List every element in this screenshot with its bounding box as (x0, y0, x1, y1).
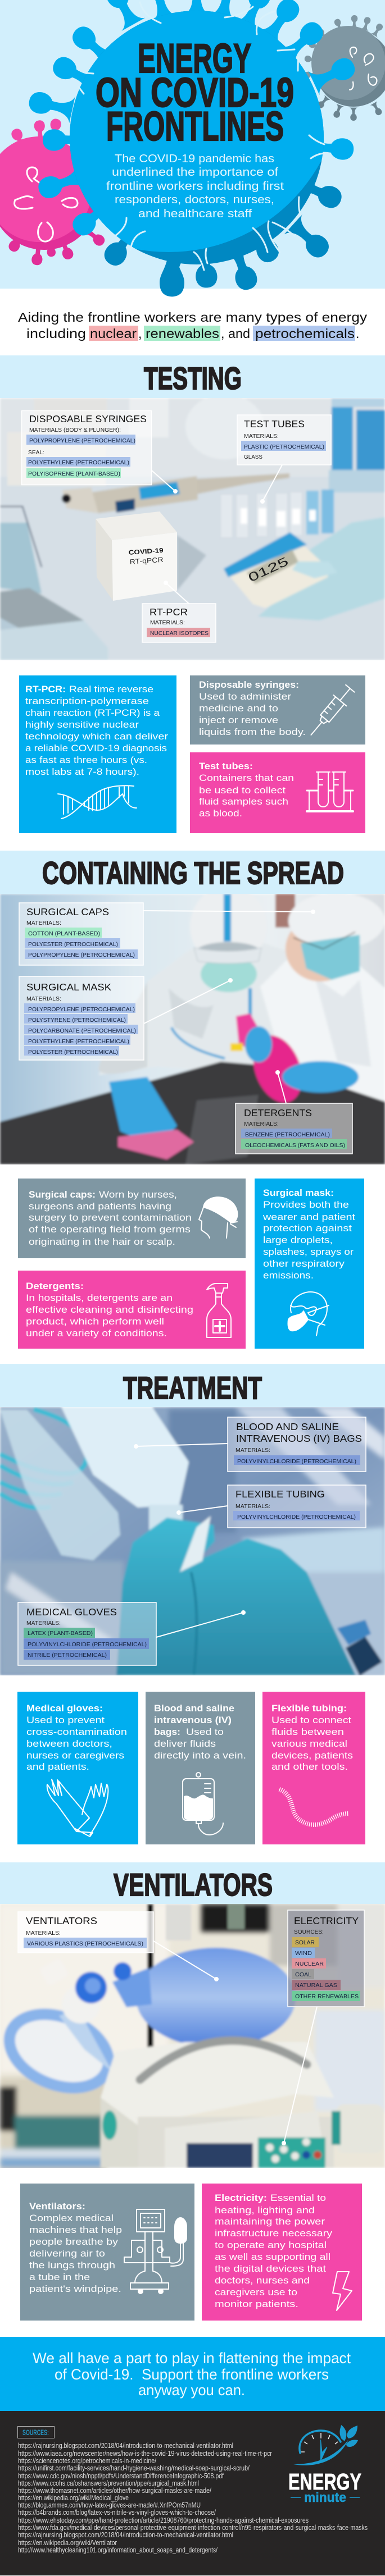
section: containing the spread (0, 851, 385, 1349)
panel: surgical mask info: splashes, sprays or (263, 1246, 354, 1257)
photo: ventilator (0, 1904, 385, 2173)
callout: electricity: OTHER RENEWABLES (295, 1993, 359, 2000)
source list: https://en.wikipedia.org/wiki/Ventilator (18, 2539, 117, 2547)
callout: disposable syringes: MATERIALS (BODY & PLUNGER): (29, 427, 121, 433)
panel: surgical caps info: surgery to prevent contamination (29, 1212, 192, 1223)
panel: surgical caps info: Surgical caps: (29, 1189, 96, 1200)
product box: RT-qPCR (129, 556, 164, 566)
panel: surgical caps info: originating in the hair or scalp. (29, 1236, 175, 1247)
source list: https://rajnursing.blogspot.com/2018/04/introduction-to-mechanical-ventilator.html (18, 2531, 233, 2539)
text block: energy types: nuclear (90, 326, 137, 341)
source list: https://en.wikipedia.org/wiki/Medical_glove (18, 2494, 129, 2502)
panel: ventilators info: a tube in the (29, 2272, 90, 2282)
source list: https://www.ccohs.ca/oshanswers/prevention/ppe/surgical_mask.html (18, 2479, 199, 2487)
callout: rt-pcr (142, 581, 216, 642)
photo: iv bags and gloves (0, 1407, 385, 1676)
heading: testing (0, 355, 385, 398)
panel: medical gloves info (17, 1692, 138, 1844)
panel: electricity info: caregivers use to (215, 2287, 297, 2298)
panel: surgical caps info (18, 1179, 246, 1258)
text block: energy types: , and (221, 326, 250, 341)
panel: iv bags info: bags: (154, 1727, 180, 1737)
panel: detergents info: effective cleaning and disinfecting (26, 1304, 193, 1315)
callout: surgical caps: COTTON (PLANT-BASED) (28, 930, 100, 937)
callout: iv bags (134, 1417, 366, 1472)
panel: surgical caps info: Worn by nurses, (99, 1189, 177, 1200)
panel: detergents info: product, which perform well (26, 1316, 164, 1327)
panel: flexible tubing info: various medical (271, 1738, 347, 1749)
panel: rt-pcr info: chain reaction (RT-PCR) is a (25, 707, 160, 718)
icon: dna (58, 785, 137, 819)
source list: https://b4brands.com/blog/latex-vs-nitrile-vs-vinyl-gloves-which-to-choose/ (18, 2509, 216, 2516)
logo: energy minute (288, 2425, 361, 2505)
panel: rt-pcr info: most labs at 7-8 hours). (25, 766, 139, 777)
panel: flexible tubing info: and other tools. (271, 1761, 348, 1772)
panel: electricity info: doctors, nurses and (215, 2275, 310, 2286)
photo: workers cleaning (0, 886, 385, 1164)
panel: surgical mask info: wearer and patient (262, 1212, 355, 1222)
panel: ventilators info (20, 2184, 194, 2321)
callout: surgical mask: POLYESTER (PETROCHEMICAL) (28, 1049, 118, 1056)
intro paragraph: The COVID-19 pandemic has (115, 153, 274, 165)
icon: spray bottle (207, 1284, 231, 1337)
panel: test tubes info: Containers that can (199, 773, 294, 783)
callout: medical gloves: NITRILE (PETROCHEMICAL) (28, 1652, 107, 1659)
callout: surgical caps: POLYPROPYLENE (PETROCHEMICAL) (28, 952, 135, 958)
product box: COVID-19 (128, 547, 164, 556)
timer display: 0125 (246, 554, 291, 585)
callout: surgical caps: MATERIALS: (26, 920, 61, 926)
callout: surgical caps: SURGICAL CAPS (26, 906, 109, 917)
text block: energy types: , (138, 326, 142, 341)
panel: electricity info: infrastructure necessary (215, 2228, 333, 2239)
panel: disposable syringes info: medicine and to (199, 703, 278, 714)
callout: test tubes: TEST TUBES (244, 418, 305, 430)
icon: surgical cap (199, 1197, 237, 1238)
callout: flexible tubing: MATERIALS: (235, 1503, 270, 1510)
panel: medical gloves info: cross-contamination (26, 1727, 127, 1737)
panel: surgical caps info: surgeons and patients having (29, 1201, 171, 1212)
panel: ventilators info: delivering air to (29, 2248, 105, 2259)
callout: medical gloves: MATERIALS: (26, 1620, 61, 1627)
callout: disposable syringes: POLYISOPRENE (PLANT-BASED) (28, 471, 120, 477)
callout: ventilators: VENTILATORS (26, 1915, 97, 1926)
title: ENERGY (138, 36, 251, 81)
panel: iv bags info: directly into a vein. (154, 1750, 246, 1761)
intro paragraph: responders, doctors, nurses, (115, 194, 274, 206)
panel: test tubes info: fluid samples such (199, 796, 288, 807)
panel: iv bags info: Blood and saline (154, 1703, 234, 1714)
virus spike that hangs over the white area (160, 254, 184, 296)
panel: detergents info: In hospitals, detergents are an (26, 1292, 173, 1303)
panel: electricity info: Electricity: (215, 2193, 267, 2203)
callout: iv bags: BLOOD AND SALINE (236, 1421, 339, 1432)
panel: disposable syringes info: inject or remove (199, 715, 278, 725)
panel: surgical mask info (255, 1179, 364, 1349)
section: ventilators (0, 1862, 385, 2321)
heading: testing: TESTING (144, 360, 242, 396)
panel: disposable syringes info: Disposable syringes: (199, 679, 299, 690)
callout: surgical mask: SURGICAL MASK (26, 981, 111, 993)
callout: test tubes (237, 415, 331, 504)
call to action: of Covid-19. Support the frontline workers (55, 2366, 329, 2383)
text block: energy types (18, 310, 368, 341)
panel: rt-pcr info: RT-PCR: (25, 684, 66, 695)
panel: rt-pcr info: highly sensitive nuclear (25, 719, 139, 730)
callout: detergents: OLEOCHEMICALS (FATS AND OILS) (245, 1142, 345, 1149)
icon: lightning bolt (333, 2272, 352, 2310)
panel: iv bags info (146, 1692, 255, 1844)
panel: surgical mask info: protection against (263, 1223, 352, 1234)
panel: medical gloves info: between doctors, (26, 1738, 112, 1749)
callout: surgical mask (19, 976, 233, 1060)
panel: surgical mask info: emissions. (263, 1270, 314, 1281)
callout: disposable syringes: DISPOSABLE SYRINGES (29, 413, 147, 424)
callout: rt-pcr: MATERIALS: (150, 619, 185, 626)
callout: electricity: COAL (295, 1971, 311, 1978)
panel: detergents info: under a variety of conditions. (26, 1328, 167, 1339)
panel: iv bags info: Used to (186, 1727, 224, 1737)
callout: rt-pcr: NUCLEAR ISOTOPES (150, 630, 209, 637)
callout: surgical mask: POLYPROPYLENE (PETROCHEMICAL) (28, 1006, 135, 1013)
source list: https://blog.ammex.com/how-latex-gloves-are-made/#.XnfPOm57nMU (18, 2501, 201, 2509)
source list: https://www.iaea.org/newscenter/news/how-is-the-covid-19-virus-detected-using-real-time-rt-pcr (18, 2450, 272, 2458)
panel: electricity info: monitor patients. (215, 2299, 298, 2309)
panel: test tubes info: as blood. (199, 808, 242, 819)
panel: rt-pcr info (19, 675, 176, 833)
callout: surgical mask: POLYCARBONATE (PETROCHEMICAL) (28, 1027, 136, 1034)
icon: large blue virus (26, 0, 359, 299)
panel: detergents info: Detergents: (26, 1281, 84, 1291)
callout: electricity: ELECTRICITY (294, 1915, 359, 1926)
panel: detergents info (18, 1271, 246, 1349)
hero background (0, 0, 385, 289)
panel: ventilators info: the lungs through (29, 2260, 115, 2271)
panel: electricity info: maintaining the power (215, 2216, 325, 2227)
panel: electricity info: heating, lighting and (215, 2205, 315, 2216)
callout: surgical caps (19, 903, 315, 965)
panel: electricity info (202, 2184, 362, 2321)
heading: treatment (0, 1364, 385, 1407)
panel: rt-pcr info: a reliable COVID-19 diagnosis (25, 743, 167, 753)
callout: electricity: SOLAR (295, 1939, 315, 1946)
text block: energy types: including (26, 326, 86, 341)
callout: disposable syringes: POLYETHYLENE (PETROCHEMICAL) (28, 459, 129, 466)
panel: ventilators info: Complex medical (29, 2213, 114, 2223)
logo: energy minute: minute (304, 2490, 346, 2505)
callout: test tubes: MATERIALS: (244, 433, 279, 440)
intro paragraph: underlined the importance of (112, 166, 279, 179)
callout: surgical caps: POLYESTER (PETROCHEMICAL) (28, 941, 118, 948)
heading: ventilators: VENTILATORS (114, 1867, 273, 1902)
icon: ventilator machine (124, 2209, 187, 2294)
intro paragraph (106, 153, 284, 220)
callout: medical gloves (18, 1602, 246, 1665)
text block: energy types: petrochemicals (255, 326, 355, 341)
panel: surgical mask info: large droplets, (263, 1235, 333, 1245)
panel: medical gloves info: Used to prevent (26, 1715, 105, 1725)
source list: https://www.ehstoday.com/ppe/hand-protection/article/21908760/protecting-hands-against-chemical-exposures (18, 2516, 309, 2524)
panel: test tubes info (190, 752, 365, 833)
callout: ventilators: VARIOUS PLASTICS (PETROCHEMICALS) (27, 1940, 143, 1947)
callout: medical gloves: LATEX (PLANT-BASED) (28, 1630, 93, 1637)
source list: http://www.healthycleaning101.org/information_about_soaps_and_detergents/ (18, 2546, 218, 2554)
source list: https://rajnursing.blogspot.com/2018/04/introduction-to-mechanical-ventilator.html (18, 2442, 233, 2450)
panel: electricity info: to operate any hospital (215, 2240, 327, 2250)
callout: electricity: WIND (295, 1950, 312, 1957)
icon: mask head (288, 1292, 329, 1336)
text block: energy types: renewables (146, 326, 219, 341)
heading: treatment: TREATMENT (123, 1370, 262, 1405)
panel: electricity info: the digital devices that (215, 2263, 326, 2274)
panel: iv bags info: intravenous (IV) (154, 1715, 232, 1725)
photo: lab bench (0, 394, 385, 660)
callout: electricity: SOURCES: (294, 1929, 324, 1935)
panel: disposable syringes info: liquids from the body. (199, 727, 306, 737)
panel: ventilators info: people breathe by (29, 2236, 119, 2247)
callout: disposable syringes: POLYPROPYLENE (PETROCHEMICAL) (29, 437, 135, 444)
callout: rt-pcr: RT-PCR (150, 606, 188, 618)
panel: ventilators info: patient's windpipe. (29, 2283, 121, 2294)
icon: iv bag (183, 1773, 223, 1835)
panel: medical gloves info: Medical gloves: (26, 1703, 103, 1714)
icon: gloves (47, 1779, 108, 1837)
callout: disposable syringes (21, 411, 178, 494)
callout: detergents: DETERGENTS (244, 1107, 312, 1118)
callout: detergents: BENZENE (PETROCHEMICAL) (245, 1131, 330, 1138)
callout: detergents (235, 1070, 352, 1154)
text block: energy types: Aiding the frontline workers are many types of energy (18, 310, 368, 325)
icon: test tubes (307, 772, 353, 811)
callout: electricity: NATURAL GAS (295, 1982, 337, 1989)
panel: electricity info: as well as supporting all (215, 2251, 330, 2262)
title: FRONTLINES (106, 104, 284, 149)
panel: surgical mask info: Provides both the (263, 1199, 349, 1210)
spike highlights (79, 2, 324, 270)
callout: surgical mask: MATERIALS: (26, 995, 61, 1002)
panel: electricity info: Essential to (270, 2193, 326, 2203)
callout: flexible tubing: FLEXIBLE TUBING (235, 1488, 325, 1500)
sources label: SOURCES: (22, 2428, 49, 2437)
panel: medical gloves info: and patients. (26, 1761, 89, 1772)
section: testing (0, 355, 385, 833)
call to action (0, 2337, 385, 2411)
panel: test tubes info: Test tubes: (199, 761, 253, 771)
panel: rt-pcr info: Real time reverse (69, 684, 153, 695)
icon: grey virus (304, 15, 385, 121)
callout: test tubes: PLASTIC (PETROCHEMICAL) (244, 444, 324, 450)
panel: surgical mask info: Surgical mask: (263, 1187, 334, 1198)
call to action: We all have a part to play in flattening the impact (33, 2350, 351, 2367)
callout: flexible tubing: POLYVINYLCHLORIDE (PETROCHEMICAL) (237, 1514, 356, 1520)
section: treatment (0, 1364, 385, 1844)
icon: syringe (305, 683, 356, 741)
intro paragraph: and healthcare staff (138, 208, 252, 220)
icon: tube (279, 1789, 349, 1825)
callout: surgical mask: POLYSTYRENE (PETROCHEMICAL) (28, 1017, 126, 1024)
panel: test tubes info: be used to collect (199, 785, 286, 796)
panel: disposable syringes info: Used to administer (199, 691, 291, 702)
product box (96, 511, 177, 601)
callout: medical gloves: MEDICAL GLOVES (26, 1606, 117, 1618)
panel: iv bags info: deliver fluids (154, 1738, 216, 1749)
callout: disposable syringes: SEAL: (28, 449, 44, 456)
sources label (18, 2427, 54, 2438)
source list: https://www.cdc.gov/niosh/npptl/pdfs/UnderstandDifferenceInfographic-508.pdf (18, 2472, 224, 2480)
panel: hero (0, 0, 385, 299)
callout: electricity: NUCLEAR (295, 1961, 324, 1967)
callout: flexible tubing (176, 1485, 366, 1528)
intro paragraph: frontline workers including first (106, 180, 284, 193)
callout: ventilators: MATERIALS: (26, 1930, 61, 1936)
panel: flexible tubing info: Flexible tubing: (271, 1703, 347, 1714)
heading: ventilators (0, 1862, 385, 1904)
callout: detergents: MATERIALS: (244, 1121, 279, 1127)
callout: electricity (282, 1910, 364, 2145)
call to action: anyway you can. (138, 2382, 245, 2399)
panel: disposable syringes info (190, 675, 365, 745)
callout: iv bags: POLYVINYLCHLORIDE (PETROCHEMICAL) (237, 1458, 356, 1465)
footer (0, 2411, 385, 2575)
logo: energy minute: ENERGY (288, 2469, 361, 2495)
source list: https://sciencenotes.org/petrochemicals-in-medicine/ (18, 2457, 156, 2465)
source list: https://unifirst.com/facility-services/hand-hygiene-washing/medical-soap-surgical-scrub/ (18, 2464, 250, 2472)
panel: rt-pcr info: technology which can deliver (25, 731, 168, 742)
callout: ventilators (18, 1912, 219, 1981)
panel: flexible tubing info (262, 1692, 365, 1844)
icon: clock and leaves (293, 2425, 358, 2465)
text block: energy types: . (356, 326, 359, 341)
callout: iv bags: MATERIALS: (235, 1447, 270, 1454)
title (96, 36, 294, 149)
callout: test tubes: GLASS (244, 454, 262, 460)
panel: surgical mask info: other respiratory (263, 1258, 345, 1269)
panel: flexible tubing info: fluids between (271, 1727, 344, 1737)
panel: medical gloves info: nurses or caregivers (26, 1750, 124, 1761)
icon: pink virus (0, 118, 107, 266)
title: ON COVID-19 (96, 70, 294, 116)
panel: surgical caps info: of the operating field from germs (29, 1224, 191, 1235)
panel: ventilators info: Ventilators: (29, 2201, 85, 2212)
callout: iv bags: INTRAVENOUS (IV) BAGS (236, 1433, 362, 1444)
panel: flexible tubing info: Used to connect (271, 1715, 351, 1725)
callout: surgical mask: POLYETHYLENE (PETROCHEMICAL) (28, 1038, 129, 1045)
panel: rt-pcr info: as fast as three hours (vs. (25, 755, 147, 765)
callout: medical gloves: POLYVINYLCHLORIDE (PETROCHEMICAL) (28, 1641, 147, 1648)
source list (18, 2442, 368, 2554)
panel: rt-pcr info: transcription-polymerase (25, 696, 149, 706)
panel: flexible tubing info: devices, patients (271, 1750, 353, 1761)
source list: https://www.thomasnet.com/articles/other/how-surgical-masks-are-made/ (18, 2487, 211, 2495)
panel: ventilators info: machines that help (29, 2225, 122, 2235)
